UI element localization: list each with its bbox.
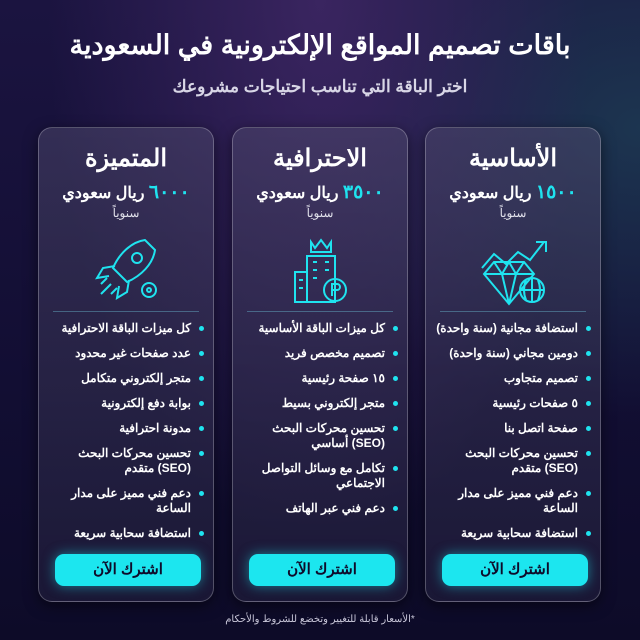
panel: premium xyxy=(38,127,214,602)
title: باقات تصميم المواقع الإلكترونية في السعودية xyxy=(70,30,570,60)
panel: professional: الاحترافية xyxy=(273,145,367,172)
panel: professional: سنوياً xyxy=(307,206,333,220)
button: اشترك الآن xyxy=(287,561,357,578)
button: اشترك الآن xyxy=(480,561,550,578)
panel: professional: ٣٥٠٠ ريال سعودي xyxy=(256,182,384,203)
panel: premium: المتميزة xyxy=(85,145,167,172)
button: اشترك الآن xyxy=(93,561,163,578)
feature list: دعم فني مميز على مدار الساعة xyxy=(71,486,191,515)
feature list: استضافة سحابية سريعة xyxy=(74,526,191,540)
button xyxy=(442,554,588,586)
feature list: ٥ صفحات رئيسية xyxy=(492,396,578,410)
feature list xyxy=(61,321,204,540)
feature list: تكامل مع وسائل التواصل الاجتماعي xyxy=(262,461,385,490)
feature list: متجر إلكتروني متكامل xyxy=(81,371,191,385)
feature list: تصميم متجاوب xyxy=(504,371,578,385)
feature list: صفحة اتصل بنا xyxy=(504,421,578,435)
subtitle: اختر الباقة التي تناسب احتياجات مشروعك xyxy=(173,77,467,96)
feature list xyxy=(258,320,398,516)
panel: premium: سنوياً xyxy=(113,206,139,220)
feature list: دومين مجاني (سنة واحدة) xyxy=(449,346,578,360)
feature list: تحسين محركات البحث (SEO) متقدم xyxy=(465,446,578,475)
feature list: تحسين محركات البحث (SEO) متقدم xyxy=(78,446,191,475)
panel: premium: ٦٠٠٠ ريال سعودي xyxy=(62,182,190,203)
feature list: تصميم مخصص فريد xyxy=(285,346,385,360)
feature list: استضافة مجانية (سنة واحدة) xyxy=(436,321,578,335)
feature list: مدونة احترافية xyxy=(119,421,191,435)
feature list: دعم فني عبر الهاتف xyxy=(286,501,385,515)
feature list: كل ميزات الباقة الأساسية xyxy=(258,321,385,335)
footnote: *الأسعار قابلة للتغيير وتخضع للشروط والأحكام xyxy=(225,614,415,625)
panel: basic xyxy=(425,127,601,602)
feature list: ١٥ صفحة رئيسية xyxy=(301,371,385,385)
feature list: عدد صفحات غير محدود xyxy=(75,346,191,360)
feature list: استضافة سحابية سريعة xyxy=(461,526,578,540)
panel: basic: سنوياً xyxy=(500,206,526,220)
feature list: دعم فني مميز على مدار الساعة xyxy=(458,486,578,515)
panel: basic: الأساسية xyxy=(469,145,557,172)
feature list: بوابة دفع إلكترونية xyxy=(101,396,191,410)
feature list xyxy=(436,321,591,540)
icon: building with crown xyxy=(294,238,347,303)
icon: diamond xyxy=(481,241,547,306)
panel: professional xyxy=(232,127,408,602)
feature list: متجر إلكتروني بسيط xyxy=(282,396,385,410)
feature list: كل ميزات الباقة الاحترافية xyxy=(61,321,191,335)
panel: basic: ١٥٠٠ ريال سعودي xyxy=(449,182,577,203)
button xyxy=(249,554,395,586)
button xyxy=(55,554,201,586)
icon: rocket xyxy=(95,239,157,300)
feature list: تحسين محركات البحث (SEO) أساسي xyxy=(272,421,385,450)
